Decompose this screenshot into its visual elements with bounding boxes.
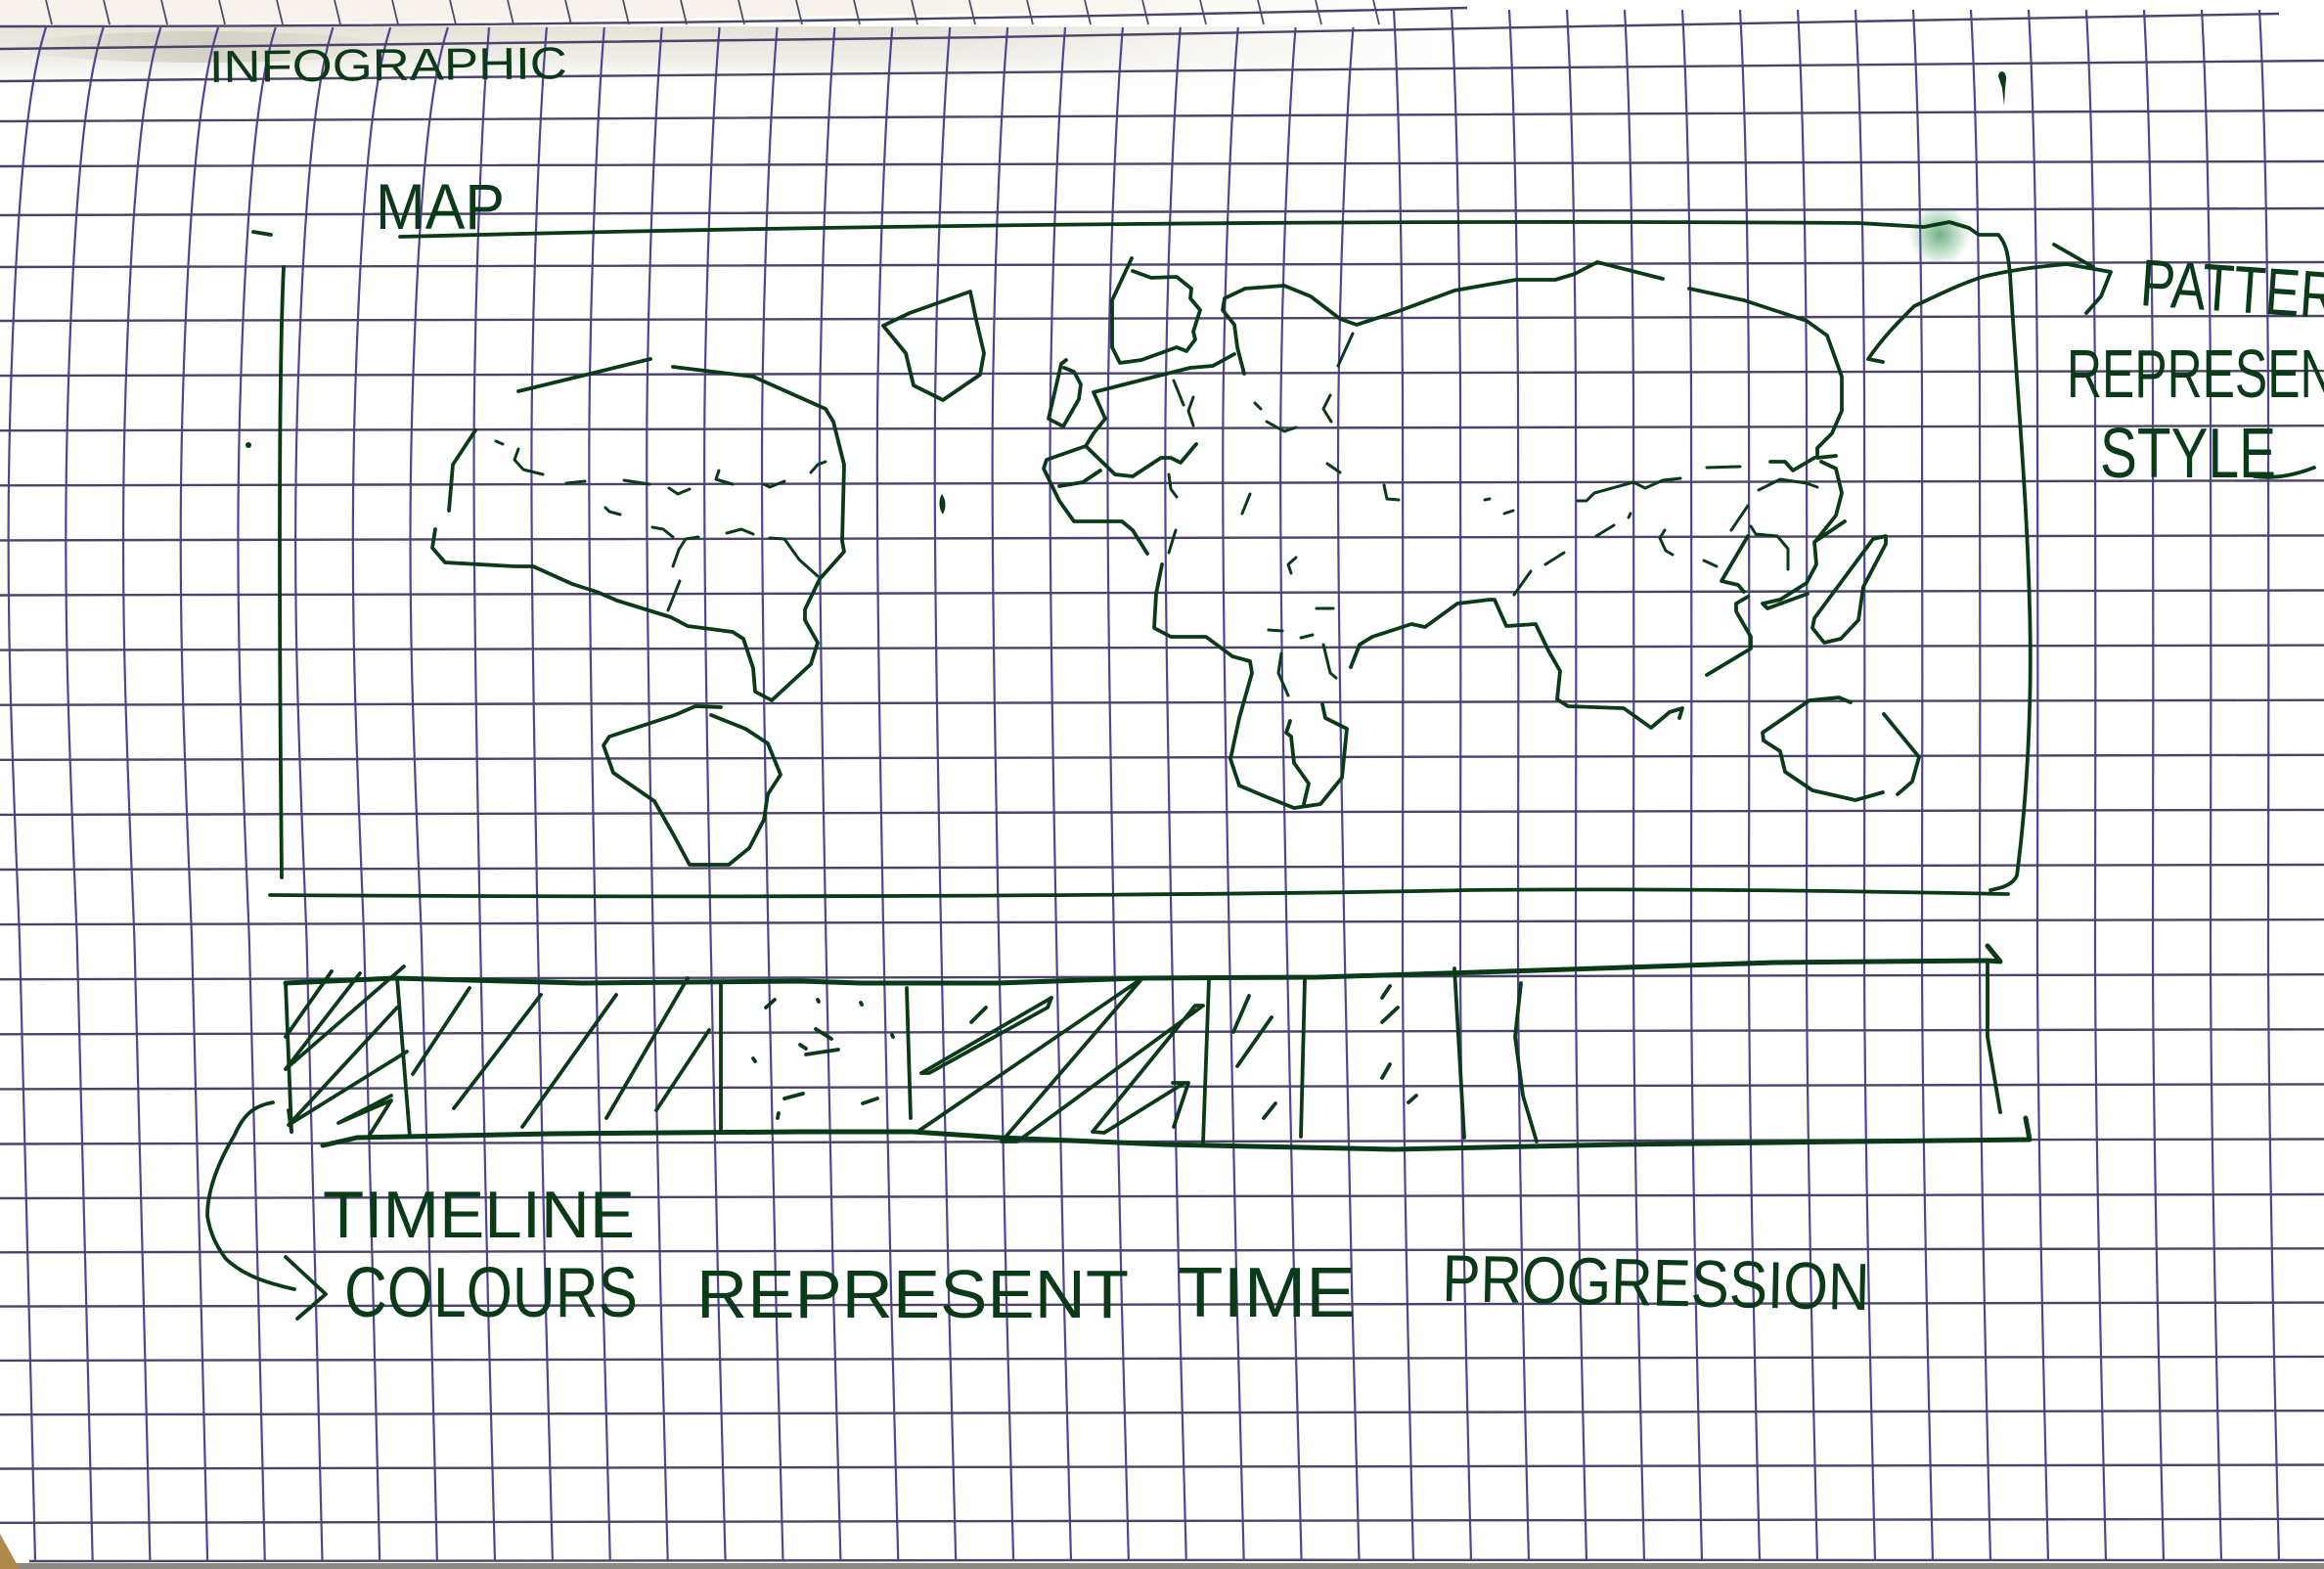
- text: colours represent time progression: COLOURS: [344, 1254, 638, 1332]
- continent: africa: [1154, 564, 1347, 808]
- continent: eurasia north coast: [1223, 262, 1842, 458]
- text: colours represent time progression: TIME: [1178, 1254, 1356, 1332]
- timeline segment 3: dotted: [753, 1000, 893, 1118]
- text: colours represent time progression: PROGRESSION: [1442, 1241, 1870, 1324]
- timeline segment 5: short hatch: [1233, 996, 1275, 1118]
- panel: map sketch: [207, 71, 2111, 1319]
- heading: timeline: TIMELINE: [323, 1178, 635, 1252]
- eurasia inner borders: [1169, 334, 1817, 695]
- map frame: [253, 222, 2031, 896]
- timeline segment 6: dashes: [1382, 986, 1416, 1102]
- island: small west: [1049, 360, 1081, 426]
- continent: australia: [1763, 697, 1919, 800]
- north america borders: [496, 441, 826, 610]
- label: style underline tail: [2255, 468, 2314, 477]
- arrow: pattern callout: [1868, 245, 2111, 362]
- ink dot: atlantic: [939, 494, 945, 515]
- panel: timeline: [286, 946, 2030, 1149]
- text: colours represent time progression: REPRESENT: [696, 1256, 1129, 1332]
- timeline frame: [286, 946, 2030, 1149]
- island: japan: [1812, 536, 1886, 643]
- asia east coast: [1707, 458, 1845, 675]
- arrow: colours callout: [207, 1102, 326, 1319]
- timeline segment 2: wide hatch: [413, 978, 709, 1127]
- island: greenland: [883, 291, 984, 400]
- ink smudge: [1908, 203, 1971, 266]
- ink dot: left margin: [246, 442, 251, 448]
- timeline outer sides: [286, 962, 2000, 1132]
- label: style: STYLE: [2100, 415, 2276, 493]
- continent: south america: [603, 706, 781, 865]
- europe west coast: [1044, 354, 1234, 554]
- island: northern landmass: [1112, 258, 1200, 363]
- continent: north america: [432, 359, 844, 700]
- title: infographic: INFOGRAPHIC: [209, 37, 567, 92]
- ink dot: top right: [1998, 71, 2006, 106]
- text: colours represent time progression: [344, 1241, 1870, 1332]
- heading: map: MAP: [376, 170, 505, 243]
- timeline segment dividers: [397, 968, 1537, 1143]
- timeline segment 4: diagonal hatch: [917, 978, 1203, 1142]
- asia south coast: [1351, 600, 1682, 728]
- timeline segment 1: dense hatch: [286, 966, 407, 1135]
